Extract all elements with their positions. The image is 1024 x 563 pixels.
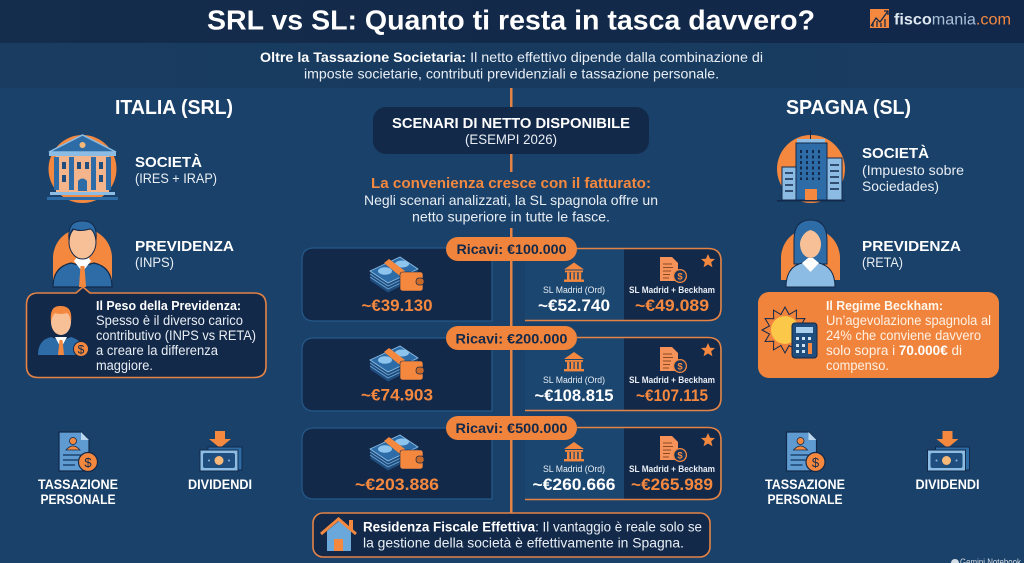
callout text: la gestione della società è effettivamente in Spagna. — [363, 534, 684, 550]
pill: ricavi 100.000: Ricavi: €100.000 — [456, 241, 567, 257]
card: Spagna 100.000 — [525, 248, 721, 320]
item: dividendi Italia: DIVIDENDI — [188, 477, 252, 492]
card: Italia 100.000 — [302, 248, 492, 321]
card: Spagna 200.000: ~€107.115 — [636, 387, 708, 405]
central text block — [360, 172, 662, 228]
item: tassazione personale Spagna — [765, 432, 845, 507]
intro text: Oltre la Tassazione Societaria: Il netto effettivo dipende dalla combinazione di — [260, 49, 763, 65]
callout: regime Beckham — [758, 292, 999, 378]
card: Italia 200.000 — [302, 338, 492, 411]
panel: scenari heading — [373, 107, 649, 154]
callout text: Il Regime Beckham: — [826, 298, 943, 313]
card: Spagna 500.000 — [525, 428, 721, 500]
label: previdenza Italia: PREVIDENZA — [135, 238, 234, 255]
item: tassazione personale Italia — [38, 432, 118, 507]
item: tassazione personale Spagna: TASSAZIONE — [765, 477, 845, 492]
pill: ricavi 200.000: Ricavi: €200.000 — [456, 330, 568, 346]
panel: scenario ricavi 200.000 — [302, 326, 721, 411]
label: società Italia — [135, 154, 217, 186]
icon: skyscraper — [777, 130, 845, 203]
label: previdenza Spagna: (RETA) — [862, 255, 903, 270]
callout text: Un’agevolazione spagnola al — [826, 313, 991, 328]
label: società Spagna: Sociedades) — [862, 179, 939, 194]
card: Italia 500.000: ~€203.886 — [355, 476, 439, 494]
callout text: Spesso è il diverso carico — [96, 313, 243, 328]
icon: man in suit — [53, 221, 112, 287]
callout: il peso della previdenza — [26, 287, 266, 378]
icon: man with coin: $ — [78, 342, 85, 356]
central text block: La convenienza cresce con il fatturato: — [371, 175, 651, 192]
icon: woman — [781, 220, 840, 287]
icon: house — [321, 519, 356, 551]
icon: man with coin — [38, 306, 88, 356]
label: previdenza Spagna — [862, 238, 961, 270]
card: Italia 500.000 — [302, 428, 492, 499]
callout text: solo sopra i 70.000€ di — [826, 343, 962, 358]
card: Spagna 500.000: SL Madrid + Beckham — [629, 464, 715, 474]
label: società Spagna: (Impuesto sobre — [862, 163, 964, 178]
heading: Italia: ITALIA (SRL) — [115, 97, 233, 119]
icon: bank building — [47, 135, 118, 203]
pill: ricavi 200.000 — [446, 326, 577, 350]
card: Spagna 500.000: ~€260.666 — [532, 476, 616, 494]
panel: scenario ricavi 100.000 — [302, 237, 721, 321]
callout text — [363, 518, 702, 550]
panel: scenari heading: SCENARI DI NETTO DISPONIBILE — [392, 115, 630, 132]
pill: ricavi 500.000: Ricavi: €500.000 — [456, 420, 568, 436]
heading: Spagna: SPAGNA (SL) — [786, 97, 911, 119]
panel: Italia previdenza — [53, 221, 234, 287]
card: Spagna 100.000: SL Madrid + Beckham — [629, 285, 715, 295]
central text block: Negli scenari analizzati, la SL spagnola offre un — [364, 192, 658, 208]
card: Spagna 200.000: SL Madrid (Ord) — [543, 375, 605, 385]
label: società Italia: (IRES + IRAP) — [135, 171, 217, 186]
item: tassazione personale Spagna: PERSONALE — [768, 492, 842, 507]
icon: sun and calculator — [762, 307, 817, 358]
pill: ricavi 100.000 — [446, 237, 577, 261]
label: previdenza Spagna: PREVIDENZA — [862, 238, 961, 255]
card: Spagna 200.000: ~€108.815 — [534, 387, 614, 405]
callout text: 24% che conviene davvero — [826, 328, 981, 343]
title: SRL vs SL: Quanto ti resta in tasca davvero? — [207, 4, 815, 36]
header band — [0, 0, 1024, 88]
label: società Spagna: SOCIETÀ — [862, 145, 929, 162]
label: società Spagna — [862, 145, 964, 194]
pill: ricavi 500.000 — [446, 416, 577, 440]
central axis line — [510, 88, 512, 513]
panel: Italia società — [47, 135, 217, 203]
callout text: a creare la differenza — [96, 343, 218, 358]
panel: Spagna previdenza — [781, 220, 961, 287]
card: Spagna 500.000: ~€265.989 — [631, 476, 713, 494]
central text block: netto superiore in tutte le fasce. — [412, 208, 610, 224]
card: Italia 200.000: ~€74.903 — [361, 386, 433, 404]
card: Spagna 200.000: SL Madrid + Beckham — [629, 375, 715, 385]
item: dividendi Spagna — [916, 431, 980, 492]
callout text: contributivo (INPS vs RETA) — [96, 328, 256, 343]
label: società Italia: SOCIETÀ — [135, 154, 202, 171]
card: Spagna 100.000: SL Madrid (Ord) — [543, 285, 605, 295]
panel: Spagna società — [777, 130, 964, 203]
card: Spagna 100.000: ~€49.089 — [635, 297, 709, 315]
panel: scenario ricavi 500.000 — [302, 416, 721, 500]
card: Spagna 100.000: ~€52.740 — [538, 297, 610, 315]
panel: scenari heading: (ESEMPI 2026) — [465, 132, 557, 147]
callout text — [96, 298, 256, 373]
item: tassazione personale Italia: TASSAZIONE — [38, 477, 118, 492]
label: previdenza Italia — [135, 238, 234, 270]
card: Spagna 200.000 — [525, 338, 721, 410]
callout text: Residenza Fiscale Effettiva: Il vantaggio è reale solo se — [363, 518, 702, 534]
callout text: compenso. — [826, 358, 889, 373]
intro text: imposte societarie, contributi previdenziali e tassazione personale. — [304, 66, 719, 82]
logo: fiscomania.com: fiscomania.com — [894, 12, 1011, 28]
item: dividendi Spagna: DIVIDENDI — [916, 477, 980, 492]
callout text: Il Peso della Previdenza: — [96, 298, 241, 313]
intro text — [260, 49, 763, 82]
item: tassazione personale Italia: PERSONALE — [40, 492, 116, 507]
card: Spagna 500.000: SL Madrid (Ord) — [543, 464, 605, 474]
item: dividendi Italia — [188, 431, 252, 492]
card: Italia 100.000: ~€39.130 — [362, 297, 432, 315]
callout text: maggiore. — [96, 358, 153, 373]
callout: residenza fiscale — [313, 513, 710, 557]
callout text — [826, 298, 991, 373]
label: previdenza Italia: (INPS) — [135, 255, 174, 270]
